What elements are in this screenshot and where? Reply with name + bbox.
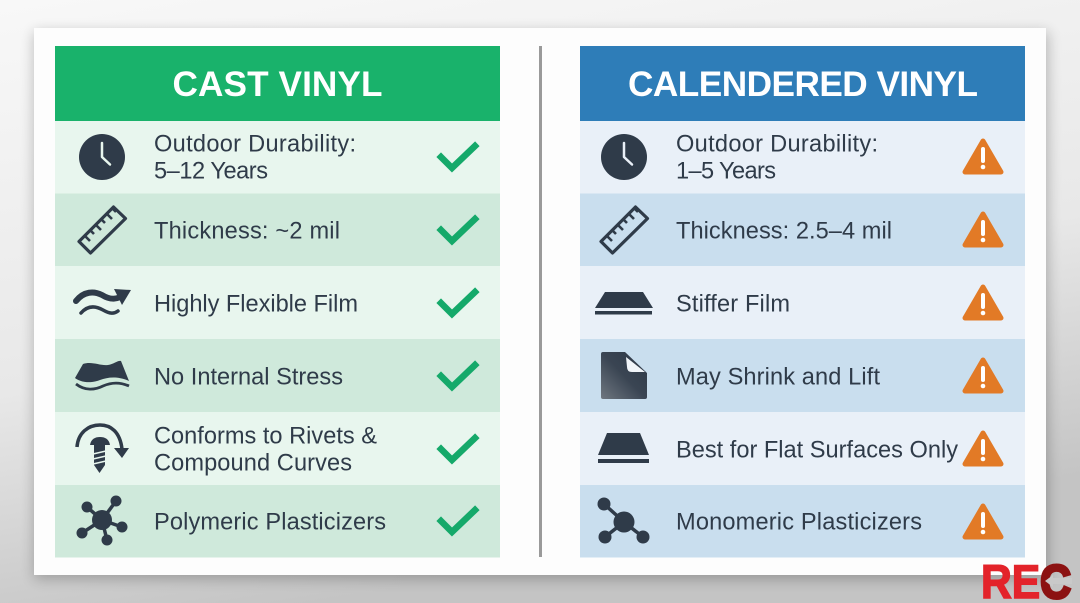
heading: calendered vinyl: CALENDERED VINYL bbox=[628, 65, 978, 104]
icon: molecule bbox=[76, 496, 128, 546]
text: durability: Outdoor Durability: bbox=[154, 132, 356, 158]
text: thickness: Thickness: ~2 mil bbox=[154, 218, 340, 244]
row: conforms bbox=[55, 412, 500, 485]
panel: cast vinyl bbox=[55, 46, 500, 558]
text: polymeric: Polymeric Plasticizers bbox=[154, 510, 386, 536]
icon: rivet with arrow bbox=[77, 425, 129, 473]
icon: warning bbox=[965, 214, 1001, 245]
icon: molecule bbox=[598, 498, 650, 544]
text: thickness: Thickness: 2.5–4 mil bbox=[676, 218, 892, 244]
heading: cast vinyl bbox=[55, 46, 500, 121]
heading: calendered vinyl bbox=[580, 46, 1025, 121]
text: durability: Outdoor Durability: bbox=[676, 132, 878, 158]
text: durability: 1–5 Years bbox=[676, 158, 776, 184]
icon: check bbox=[441, 292, 475, 314]
icon: ruler bbox=[601, 207, 648, 253]
text: stiffer: Stiffer Film bbox=[676, 292, 790, 318]
text: flat: Best for Flat Surfaces Only bbox=[676, 438, 958, 464]
row: monomeric bbox=[580, 485, 1025, 558]
row: no internal stress bbox=[55, 339, 500, 412]
row: outdoor durability bbox=[55, 121, 500, 194]
icon: warning bbox=[965, 287, 1001, 318]
row: shrink and lift bbox=[580, 339, 1025, 412]
row: polymeric bbox=[55, 485, 500, 558]
row: thickness bbox=[580, 194, 1025, 266]
icon: clock bbox=[79, 134, 125, 180]
icon: flat sheet bbox=[598, 433, 649, 463]
icon: stiff sheet bbox=[595, 292, 653, 314]
text: monomeric: Monomeric Plasticizers bbox=[676, 510, 922, 536]
icon: warning bbox=[965, 141, 1001, 172]
icon: wavy arrow bbox=[76, 289, 131, 313]
icon: check bbox=[441, 146, 475, 168]
row: outdoor durability bbox=[580, 121, 1025, 194]
text: shrink: May Shrink and Lift bbox=[676, 364, 880, 390]
panel: calendered vinyl bbox=[580, 46, 1025, 558]
icon: warning bbox=[965, 506, 1001, 537]
text: durability: 5–12 Years bbox=[154, 158, 268, 184]
row: flat surfaces bbox=[580, 412, 1025, 485]
icon: warning bbox=[965, 433, 1001, 464]
text: stress: No Internal Stress bbox=[154, 364, 343, 390]
icon: check bbox=[441, 365, 475, 387]
text: flexible: Highly Flexible Film bbox=[154, 292, 358, 318]
row: thickness bbox=[55, 194, 500, 266]
icon: check bbox=[441, 438, 475, 460]
text: conforms: Conforms to Rivets & bbox=[154, 424, 377, 450]
heading: cast vinyl: CAST VINYL bbox=[172, 65, 382, 104]
icon: relaxed sheet bbox=[75, 361, 129, 389]
icon: peeling sheet bbox=[601, 352, 647, 399]
row: stiffer film bbox=[580, 266, 1025, 339]
icon: ruler bbox=[79, 207, 126, 253]
icon: clock bbox=[601, 134, 647, 180]
row: flexible film bbox=[55, 266, 500, 339]
icon: check bbox=[441, 219, 475, 241]
icon: warning bbox=[965, 360, 1001, 391]
text: conforms: Compound Curves bbox=[154, 450, 352, 476]
icon: check bbox=[441, 510, 475, 532]
